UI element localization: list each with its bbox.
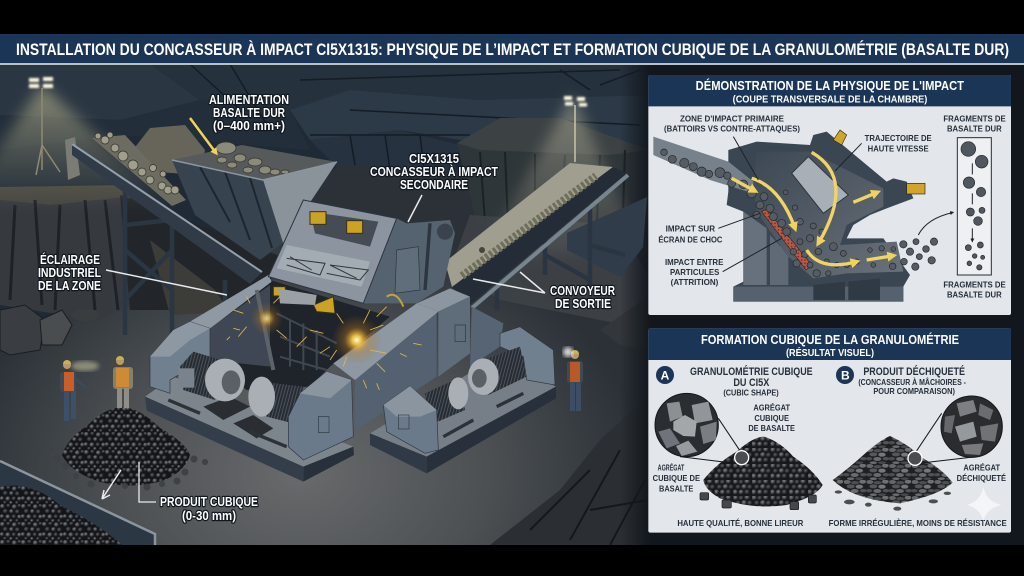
callout: crusher: SECONDAIRE [400, 178, 468, 192]
chamber labels: ZONE D'IMPACT PRIMAIRE [680, 114, 784, 124]
badge B: B [841, 368, 850, 382]
icon: sparkle watermark [967, 487, 1002, 522]
panel header [648, 75, 1011, 106]
loose rocks around the pile [50, 446, 208, 490]
leader: lighting [106, 270, 227, 295]
badge A [656, 366, 674, 384]
icon: yellow hydraulic units [273, 212, 363, 313]
crusher body side [363, 218, 455, 303]
callout: feed: (0–400 mm+) [213, 119, 285, 133]
cubic pile A [703, 437, 823, 506]
badge A: A [661, 368, 670, 382]
motor 4 [468, 347, 527, 395]
chamber labels: ÉCRAN DE CHOC [658, 234, 723, 244]
panel labels: PRODUIT DÉCHIQUETÉ [863, 365, 965, 378]
leader: output conveyor [473, 272, 545, 293]
arrow: to bin [102, 470, 121, 499]
light cone: left lamp [0, 85, 175, 205]
light cone: right lamp [480, 95, 640, 260]
panel header: FORMATION CUBIQUE DE LA GRANULOMÉTRIE [701, 332, 959, 347]
lower front mechanism [257, 288, 403, 370]
motor 3 [425, 377, 468, 425]
callout: feed: ALIMENTATION [209, 93, 289, 107]
right base frame [370, 357, 556, 473]
chamber labels: IMPACT ENTRE [665, 257, 724, 267]
leader: crusher [408, 195, 422, 222]
feed conveyor and rock supply [65, 125, 262, 345]
output conveyor [445, 163, 647, 310]
title bar [0, 34, 1024, 65]
panel: cubic grading formation [648, 328, 1011, 533]
panel labels: POUR COMPARAISON) [873, 386, 955, 396]
feed hopper [172, 142, 337, 260]
callout: lighting [38, 252, 101, 293]
chamber labels: PARTICULES [670, 267, 720, 277]
panel labels: BASALTE [659, 483, 694, 493]
callout: output conveyor: DE SORTIE [555, 297, 611, 311]
fragment size column [957, 138, 991, 275]
worker 3 [563, 347, 583, 411]
motor 1 [178, 352, 245, 401]
worker 2 [113, 356, 133, 408]
detail inset B [908, 396, 1002, 465]
panel labels: CUBIQUE DE [653, 473, 700, 483]
panel labels: AGRÉGAT [963, 463, 1001, 473]
panel labels: HAUTE QUALITÉ, BONNE LIREUR [677, 518, 804, 528]
chamber labels: BASALTE DUR [947, 124, 1002, 134]
left base frame [145, 377, 354, 482]
callout: output conveyor [550, 284, 615, 311]
callout: feed: BASALTE DUR [213, 106, 285, 120]
arrow: feed [190, 118, 216, 153]
crushing cavity [210, 280, 390, 390]
panel header: DÉMONSTRATION DE LA PHYSIQUE DE L'IMPACT [696, 78, 964, 93]
callout: crusher: CI5X1315 [409, 152, 459, 166]
left wall [190, 275, 272, 367]
icon: yellow adjusters [833, 130, 925, 194]
callout: feed [209, 93, 289, 133]
motor 2 [248, 377, 303, 423]
icon: left floodlight tower [29, 77, 60, 175]
right guard block [383, 386, 438, 453]
panel labels: (CUBIC SHAPE) [723, 387, 779, 397]
icon: right floodlight tower [564, 96, 587, 162]
panel header: (COUPE TRANSVERSALE DE LA CHAMBRE) [733, 94, 927, 105]
callout: cubic product: (0-30 mm) [182, 509, 236, 523]
rock collection bin [0, 461, 156, 545]
right wall and tower [333, 288, 470, 431]
callout: lighting: INDUSTRIEL [38, 266, 101, 280]
panel labels: DU CI5X [733, 377, 770, 389]
left end guard block [150, 322, 210, 393]
callout: cubic product [160, 495, 258, 523]
callout: output conveyor: CONVOYEUR [550, 284, 615, 298]
chamber labels: TRAJECTOIRE DE [865, 133, 932, 143]
yellow trajectory arrows [732, 152, 893, 265]
product pile [62, 407, 190, 486]
panel labels: CUBIQUE [754, 413, 789, 423]
panel labels [653, 365, 1007, 528]
worker 1 [60, 360, 99, 421]
panel header: (RÉSULTAT VISUEL) [786, 346, 874, 359]
panel labels: (CONCASSEUR À MÂCHOIRES - [858, 376, 966, 387]
CI5X1315 impact crusher machine [145, 200, 556, 482]
callout: crusher [370, 152, 498, 192]
right far guard block [500, 327, 555, 385]
chamber labels: FRAGMENTS DE [943, 114, 1006, 124]
chamber labels: HAUTE VITESSE [868, 144, 929, 154]
crusher sloped top [268, 200, 397, 303]
panel header [648, 328, 1011, 360]
callout: crusher: CONCASSEUR À IMPACT [370, 164, 498, 179]
front end guard block [288, 372, 353, 460]
panel labels: AGRÉGAT [753, 403, 791, 413]
detail inset A [655, 393, 749, 465]
chamber leader lines [718, 137, 953, 272]
panel labels: DE BASALTE [748, 423, 795, 433]
chamber labels: (ATTRITION) [671, 277, 718, 287]
sparks [227, 297, 422, 390]
panel: impact physics [648, 75, 1011, 315]
chamber labels [658, 114, 1006, 299]
chamber labels: IMPACT SUR [666, 224, 716, 234]
panel labels: FORME IRRÉGULIÈRE, MOINS DE RÉSISTANCE [829, 518, 1007, 528]
chamber labels: FRAGMENTS DE [943, 279, 1006, 289]
loose cubic rocks [700, 493, 816, 510]
irregular pile B [833, 436, 953, 503]
chamber labels: BASALTE DUR [947, 289, 1002, 299]
loose irregular rocks [835, 490, 951, 511]
crusher chamber cross-section [653, 130, 925, 302]
badge B [836, 366, 854, 384]
rock fragments in chamber [661, 149, 938, 277]
leader: cubic product [139, 462, 156, 502]
panel labels: GRANULOMÉTRIE CUBIQUE [690, 365, 813, 378]
callout: lighting: DE LA ZONE [38, 279, 101, 293]
callout: lighting: ÉCLAIRAGE [40, 252, 100, 267]
chamber labels: (BATTOIRS VS CONTRE-ATTAQUES) [664, 124, 800, 134]
rear right housing [470, 307, 503, 367]
panel labels: DÉCHIQUETÉ [957, 473, 1006, 483]
panel labels: AGRÉGAT [658, 463, 685, 473]
callout: cubic product: PRODUIT CUBIQUE [160, 495, 258, 509]
